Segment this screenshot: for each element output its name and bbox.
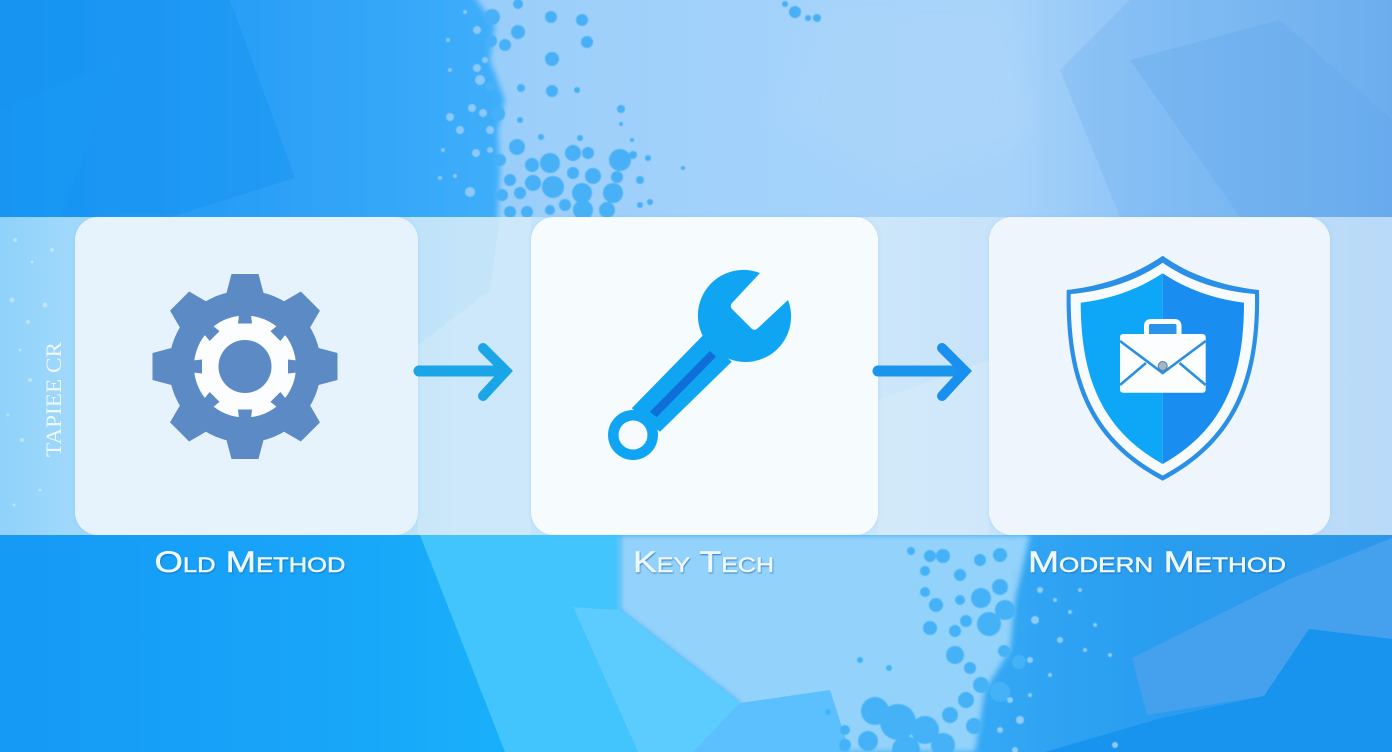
paint speckles: light flecks on top blue — [438, 10, 494, 197]
background: bottom mid facet — [573, 607, 740, 752]
background: bottom left blue — [0, 535, 505, 752]
label: key tech: Key Tech — [633, 546, 774, 579]
band facets — [418, 217, 989, 535]
paint splatter: top — [484, 0, 821, 220]
icon: wrench — [608, 270, 791, 460]
band speckles — [6, 238, 54, 506]
background: bottom section — [0, 535, 1392, 752]
background: bottom light facet — [620, 535, 1030, 752]
vertical caption: TAPIEE CR — [41, 342, 66, 457]
paint speckles: light flecks on bottom blue — [997, 572, 1118, 752]
label: modern method: Modern Method — [1028, 546, 1286, 579]
paint splatter: bottom — [825, 547, 1026, 752]
background facets: top — [0, 0, 1392, 217]
label: old method: Old Method — [154, 546, 346, 579]
arrow: key tech to modern — [878, 348, 965, 396]
background facets: bottom right — [1045, 538, 1392, 752]
panel: modern method — [989, 217, 1330, 535]
arrow: old to key tech — [419, 348, 506, 396]
panel: key tech — [531, 217, 878, 535]
card background — [75, 217, 418, 535]
icon: gear — [152, 274, 338, 459]
card background — [989, 217, 1330, 535]
background: bottom lower facet — [693, 690, 850, 752]
briefcase handle — [1146, 322, 1179, 336]
briefcase envelope — [1120, 334, 1206, 393]
background: top light section — [0, 0, 1392, 217]
translucent band — [0, 217, 1392, 535]
card background — [531, 217, 878, 535]
panel: old method — [75, 217, 418, 535]
background: top left blue wash — [0, 0, 505, 230]
background: bottom cyan facet — [420, 535, 638, 752]
icon: shield with briefcase — [1067, 256, 1259, 481]
